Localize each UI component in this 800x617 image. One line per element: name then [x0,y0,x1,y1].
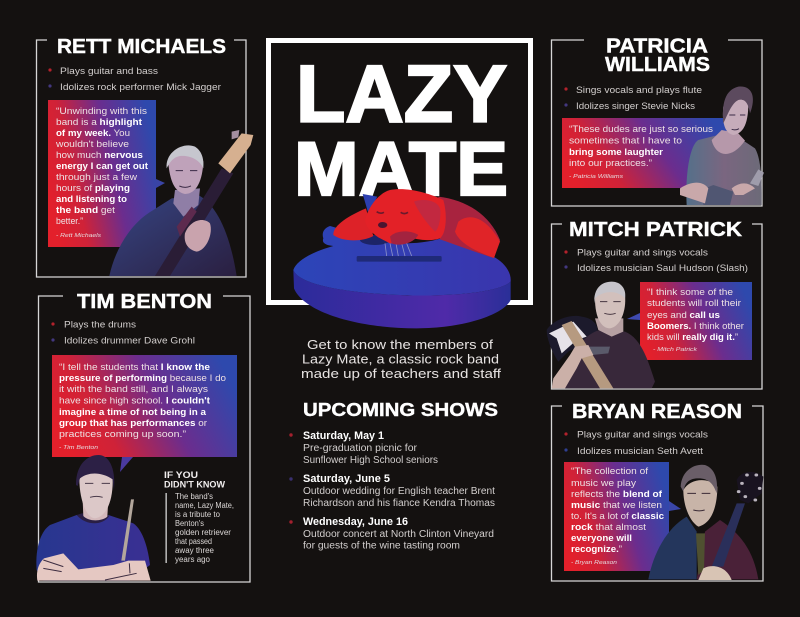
callout: if you didn't know: golden retriever [175,528,231,537]
bullet facts: Plays guitar and bass [60,66,158,77]
bullet facts: Idolizes singer Stevie Nicks [576,101,695,112]
shows list: Outdoor wedding for English teacher Brent [303,486,495,497]
quote box: to. It's a lot of classic [571,510,664,521]
illustration: Tim with drumstick [36,455,151,581]
quote box: have since high school. I couldn't [59,394,210,406]
bullet facts: Plays guitar and sings vocals [577,430,708,440]
illustration: dog on guitar [293,189,511,328]
quote box: and listening to [56,193,127,204]
quote box [564,462,681,571]
quote box: how much nervous [56,149,143,160]
panel: Mitch Patrick [547,219,762,389]
heading: Patricia Williams [605,36,710,76]
quote box [562,118,727,188]
callout: if you didn't know: is a tribute to [175,510,221,519]
quote box: band is a highlight [56,116,142,127]
shows list: Saturday, June 5 [303,473,390,485]
quote box: recognize.” [571,543,622,554]
quote box: - Bryan Reason [571,560,617,566]
logo frame [268,40,530,302]
quote box: students will roll their [647,297,741,308]
quote box: better.” [56,215,83,226]
quote box: - Mitch Patrick [653,347,698,353]
quote box: it with the band still, and I always [59,383,208,394]
callout: if you didn't know: DIDN'T KNOW [164,480,225,490]
quote box: everyone will [571,532,632,543]
quote box: of my week. You [56,127,130,138]
quote box: through just a few [56,171,137,182]
quote box: imagine a time of not being in a [59,406,207,417]
bullet facts: Plays guitar and sings vocals [577,248,708,258]
quote box: “I tell the students that I know the [59,361,210,372]
quote box [627,282,752,360]
bullet facts: Sings vocals and plays flute [576,85,702,96]
quote box: Boomers. I think other [647,320,744,331]
title: Lazy Mate: LAZY [296,50,507,140]
quote box: into our practices.” [569,157,652,168]
quote box: - Tim Benton [59,445,98,451]
callout: if you didn't know: The band's [175,492,213,501]
illustration: Bryan with guitar [648,465,763,580]
quote box: reflects the blend of [571,488,663,499]
quote box: “These dudes are just so serious [569,123,713,134]
heading: Patricia Williams: WILLIAMS [605,54,710,76]
callout: if you didn't know: years ago [175,555,211,564]
shows list: Sunflower High School seniors [303,455,438,466]
quote box: - Rett Michaels [56,233,102,239]
shows list: Saturday, May 1 [303,430,384,442]
panel: Bryan Reason [552,401,763,581]
quote box: hours of playing [56,182,130,193]
quote box: “Unwinding with this [56,105,147,116]
quote box: pressure of performing because I do [59,372,226,383]
quote box: sometimes that I have to [569,134,682,146]
heading: Bryan Reason: BRYAN REASON [572,401,742,423]
callout: if you didn't know [164,470,234,564]
quote box: rock that almost [571,521,646,532]
shows list: Outdoor concert at North Clinton Vineyard [303,529,494,540]
heading: Rett Michaels: RETT MICHAELS [57,36,226,58]
bullet facts: Idolizes musician Seth Avett [577,446,703,457]
heading: Patricia Williams: PATRICIA [606,36,708,58]
quote box: the band get [56,204,115,215]
shows list [289,430,495,552]
quote box: - Patricia Williams [569,174,624,180]
bullet facts: Plays the drums [64,320,136,330]
illustration: Mitch with electric guitar [547,282,655,388]
quote box: music we play [571,477,636,488]
quote box: kids will really dig it.” [647,331,738,342]
shows list: Richardson and his fiance Kendra Thomas [303,498,495,509]
callout: if you didn't know: name, Lazy Mate, [175,501,234,510]
bullet facts [564,248,748,274]
title: Lazy Mate [294,50,508,212]
intro text: Get to know the members of [307,337,493,352]
intro text: Lazy Mate, a classic rock band [302,352,499,366]
panel: Patricia Williams [552,36,764,206]
bullet facts [48,66,222,93]
title: Lazy Mate: MATE [294,127,508,212]
quote box: group that has performances or [59,417,207,428]
panel: Rett Michaels [36,36,253,277]
heading: upcoming shows: UPCOMING SHOWS [303,400,498,420]
intro text: made up of teachers and staff [301,366,501,381]
bullet facts [564,85,702,112]
bullet facts [564,430,708,457]
callout: if you didn't know: IF YOU [164,470,198,480]
illustration: Patricia with microphone [680,87,764,205]
panel: Tim Benton [36,291,250,582]
bullet facts: Idolizes musician Saul Hudson (Slash) [577,263,748,274]
shows list: Pre-graduation picnic for [303,443,418,454]
quote box: bring some laughter [569,146,663,157]
bullet facts: Idolizes rock performer Mick Jagger [60,82,222,93]
intro text [301,337,501,381]
quote box: wouldn't believe [55,138,129,149]
bullet facts [51,320,195,346]
callout: if you didn't know: away three [175,546,215,555]
callout: if you didn't know: that passed [175,537,212,546]
quote box: eyes and call us [647,309,720,320]
quote box: “The collection of [571,465,648,476]
callout: if you didn't know: Benton's [175,519,204,528]
quote box: energy I can get out [56,160,148,171]
heading: Mitch Patrick: MITCH PATRICK [569,219,743,241]
shows list: for guests of the wine tasting room [303,540,460,552]
quote box: practices coming up soon.” [59,428,186,439]
quote box: music that we listen [571,499,662,510]
quote box: “I think some of the [647,286,733,297]
illustration: Rett with bass guitar [109,130,253,276]
shows list: Wednesday, June 16 [303,516,408,528]
heading: Tim Benton: TIM BENTON [77,291,212,313]
quote box [52,355,237,472]
bullet facts: Idolizes drummer Dave Grohl [64,336,195,346]
quote box [48,100,165,247]
